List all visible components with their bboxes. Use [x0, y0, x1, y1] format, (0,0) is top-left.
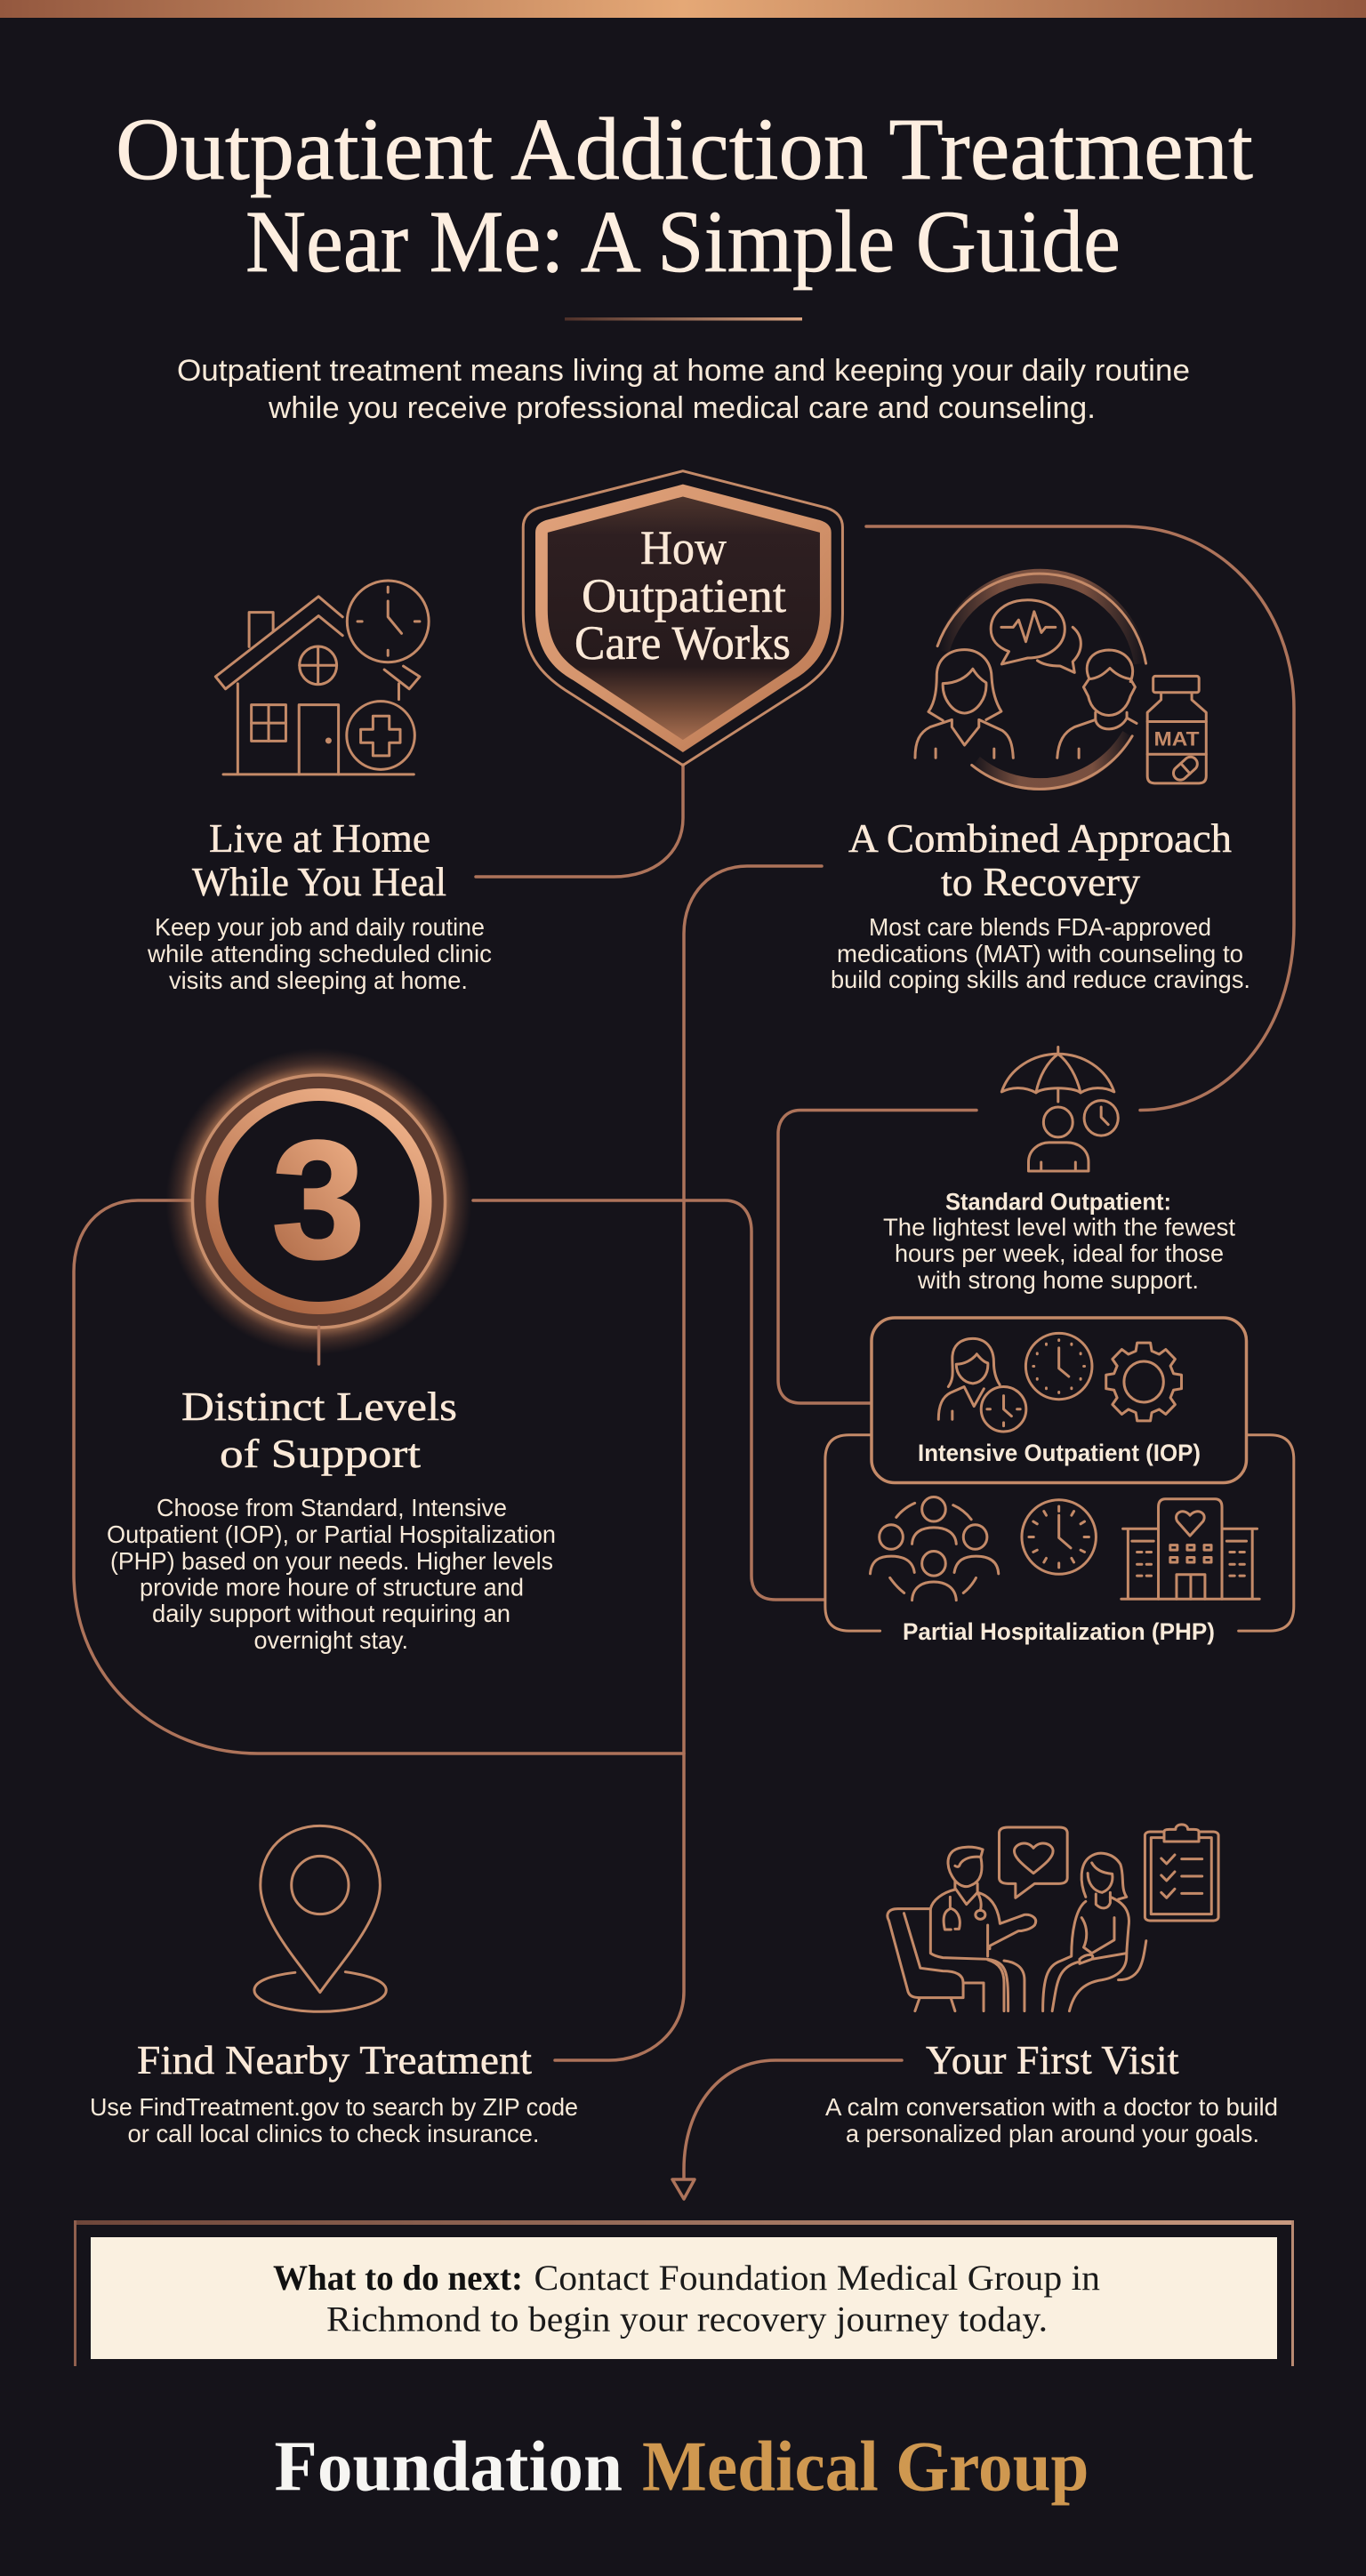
- footer brand: Foundation: [274, 2428, 623, 2506]
- Distinct Levels heading: Distinct Levels: [181, 1384, 457, 1429]
- Combined Approach text: build coping skills and reduce cravings.: [831, 966, 1250, 993]
- Your First Visit text: [825, 2093, 1278, 2147]
- Live at Home text: visits and sleeping at home.: [169, 967, 468, 994]
- icon: two people, speech bubbles, MAT bottle: MAT: [1154, 727, 1200, 750]
- Find Nearby Treatment text: or call local clinics to check insurance.: [128, 2120, 539, 2147]
- PHP label: Partial Hospitalization (PHP): [903, 1618, 1215, 1645]
- Combined Approach text: medications (MAT) with counseling to: [837, 940, 1243, 967]
- icon: doctor and patient conversation with clipboard: [888, 1825, 1218, 2011]
- title: Near Me: A Simple Guide: [245, 192, 1121, 291]
- footer brand: Medical Group: [642, 2428, 1089, 2506]
- icon: clock: [1022, 1500, 1096, 1574]
- Standard Outpatient text: with strong home support.: [917, 1266, 1199, 1294]
- title divider: [565, 317, 802, 320]
- Your First Visit text: A calm conversation with a doctor to build: [825, 2093, 1278, 2121]
- Distinct Levels text: overnight stay.: [254, 1626, 408, 1654]
- connector: Combined Approach down to Find Treatment: [555, 866, 822, 2060]
- callout: what to do next: What to do next:: [273, 2258, 523, 2298]
- Your First Visit text: a personalized plan around your goals.: [846, 2120, 1259, 2147]
- intro text: [177, 354, 1190, 425]
- Distinct Levels text: [107, 1494, 556, 1654]
- Live at Home text: Keep your job and daily routine: [155, 913, 485, 941]
- icon: hospital: [1121, 1499, 1259, 1599]
- Distinct Levels heading: of Support: [220, 1431, 421, 1476]
- top accent bar: [0, 0, 1366, 18]
- arrow head: [672, 2179, 695, 2199]
- Combined Approach heading: [848, 815, 1232, 904]
- Combined Approach text: [831, 913, 1250, 993]
- Find Nearby Treatment text: [90, 2093, 578, 2147]
- Standard Outpatient text: The lightest level with the fewest: [883, 1213, 1235, 1241]
- shield: How Outpatient Care Works: Outpatient: [582, 569, 786, 622]
- Live at Home heading: [192, 815, 446, 904]
- connector: First Visit to arrow: [684, 2060, 902, 2179]
- shield: How Outpatient Care Works: [523, 471, 842, 766]
- Distinct Levels heading: [181, 1384, 457, 1476]
- Standard Outpatient text: hours per week, ideal for those: [895, 1240, 1224, 1267]
- Find Nearby Treatment text: Use FindTreatment.gov to search by ZIP code: [90, 2093, 578, 2121]
- number 3 badge: [165, 1048, 471, 1354]
- Combined Approach text: Most care blends FDA-approved: [869, 913, 1211, 941]
- shield: How Outpatient Care Works: Care Works: [575, 616, 791, 670]
- connector: shield to Live at Home: [476, 765, 683, 877]
- icon: two people, speech bubbles, MAT bottle: [915, 574, 1206, 789]
- callout: what to do next: [74, 2220, 1294, 2366]
- panel: Partial Hospitalization: [825, 1435, 1294, 1645]
- Find Nearby Treatment heading: Find Nearby Treatment: [137, 2037, 532, 2082]
- connector: circle left loop: [74, 1200, 684, 1753]
- Distinct Levels text: Choose from Standard, Intensive: [157, 1494, 507, 1521]
- icon: group of people: [870, 1497, 999, 1601]
- Standard Outpatient text: [883, 1188, 1235, 1294]
- callout: what to do next: Richmond to begin your recovery journey today.: [326, 2299, 1048, 2339]
- Combined Approach heading: to Recovery: [941, 859, 1140, 904]
- Live at Home heading: While You Heal: [192, 859, 446, 904]
- Combined Approach heading: A Combined Approach: [848, 815, 1232, 861]
- title: Outpatient Addiction Treatment: [116, 100, 1253, 198]
- shield: How Outpatient Care Works: How: [640, 521, 727, 574]
- panel: Intensive Outpatient: [872, 1318, 1247, 1483]
- Live at Home text: while attending scheduled clinic: [147, 940, 492, 967]
- Distinct Levels text: daily support without requiring an: [152, 1600, 510, 1627]
- connector: circle to PHP: [473, 1200, 824, 1600]
- callout: what to do next: Contact Foundation Medical Group in: [534, 2258, 1100, 2298]
- intro text: while you receive professional medical care and counseling.: [268, 391, 1096, 425]
- IOP label: Intensive Outpatient (IOP): [918, 1440, 1201, 1466]
- Standard Outpatient text: Standard Outpatient:: [945, 1188, 1171, 1215]
- Live at Home text: [147, 913, 492, 994]
- Live at Home heading: Live at Home: [209, 815, 430, 861]
- PHP frame: [825, 1435, 1294, 1631]
- number 3 badge: 3: [272, 1106, 365, 1293]
- Your First Visit heading: Your First Visit: [926, 2037, 1179, 2082]
- connector: Standard to IOP: [778, 1110, 976, 1403]
- icon: umbrella over person with clock: [1001, 1047, 1118, 1171]
- icon: house with clock and medical cross: [215, 581, 429, 774]
- icon: map pin: [254, 1826, 386, 2011]
- title: [116, 100, 1253, 291]
- Distinct Levels text: provide more houre of structure and: [140, 1574, 524, 1601]
- Distinct Levels text: (PHP) based on your needs. Higher levels: [110, 1547, 553, 1575]
- icon: woman with clock, wall clock, gear: [938, 1333, 1182, 1432]
- footer brand: [274, 2428, 1089, 2506]
- connector: shield to Combined Approach to Standard: [866, 526, 1294, 1110]
- connector: badge stem: [317, 1327, 320, 1364]
- intro text: Outpatient treatment means living at home and keeping your daily routine: [177, 354, 1190, 388]
- Distinct Levels text: Outpatient (IOP), or Partial Hospitalization: [107, 1521, 556, 1548]
